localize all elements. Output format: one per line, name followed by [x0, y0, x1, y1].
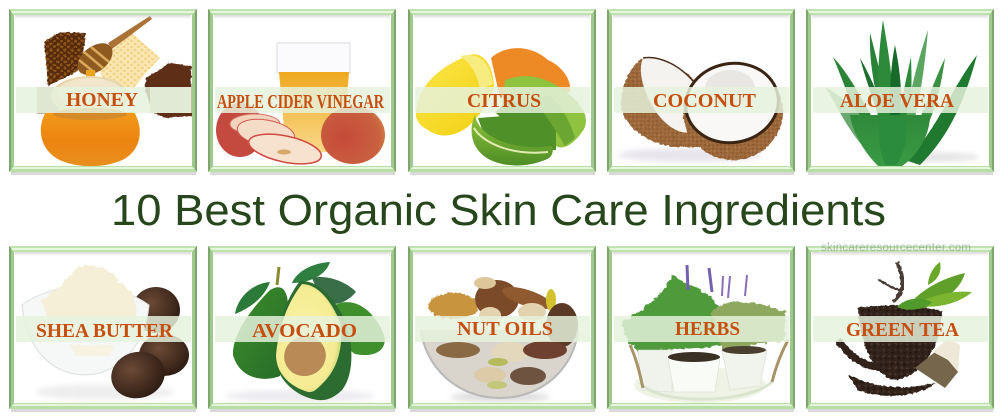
frame: green tea: [806, 246, 994, 412]
label: herbs: HERBS: [675, 318, 740, 340]
illustration: coconut halves: [618, 54, 786, 162]
label band: coconut: [614, 87, 789, 113]
frame: avocado: [208, 246, 396, 412]
panel: apple cider vinegar: [208, 9, 396, 175]
label: avocado: AVOCADO: [252, 320, 357, 342]
label band: nut oils: [415, 316, 590, 342]
panel: coconut: [607, 9, 795, 175]
illustration: citrus peels: [416, 48, 586, 165]
frame: apple cider vinegar: [208, 9, 396, 175]
panel: shea butter: [9, 246, 197, 412]
panel: nut oils: [408, 246, 596, 412]
label: shea butter: SHEA BUTTER: [36, 320, 174, 342]
illustration: potted herbs: [622, 265, 788, 403]
label: honey: HONEY: [66, 89, 139, 111]
panel: honey: [9, 9, 197, 175]
illustration: shea butter bowl and nuts: [22, 266, 189, 404]
label: aloe vera: ALOE VERA: [840, 90, 955, 112]
frame: citrus: [408, 9, 596, 175]
label: citrus: CITRUS: [467, 90, 541, 112]
illustration: bowl of nuts: [421, 277, 578, 402]
illustration: honey jar and comb: [37, 16, 192, 166]
panel: aloe vera: [806, 9, 994, 175]
panel: green tea: [806, 242, 994, 412]
illustration: aloe vera plant: [825, 20, 980, 166]
frame: shea butter: [9, 246, 197, 412]
panel: citrus: [408, 9, 596, 175]
label: nut oils: NUT OILS: [457, 318, 553, 340]
label band: herbs: [614, 316, 789, 342]
frame: herbs: [607, 246, 795, 412]
frame: honey: [9, 9, 197, 175]
title: 10 Best Organic Skin Care Ingredients: [111, 186, 886, 235]
frame: nut oils: [408, 246, 596, 412]
frame: aloe vera: [806, 9, 994, 175]
illustration: vinegar glass and apples: [216, 43, 385, 169]
label: coconut: COCONUT: [653, 90, 757, 112]
label: apple cider vinegar: APPLE CIDER VINEGAR: [217, 91, 384, 113]
illustration: tea leaf cup: [838, 262, 972, 396]
label: green tea: GREEN TEA: [846, 319, 960, 341]
label band: apple cider vinegar: [215, 87, 390, 113]
label band: citrus: [415, 87, 590, 113]
illustration: avocados and leaves: [225, 262, 385, 402]
label band: shea butter: [16, 316, 191, 342]
frame: coconut: [607, 9, 795, 175]
label band: avocado: [215, 316, 390, 342]
watermark: skincareresourcecenter.com: [821, 242, 971, 254]
label band: honey: [16, 87, 191, 113]
panel: herbs: [607, 246, 795, 412]
label band: aloe vera: [813, 87, 988, 113]
label band: green tea: [813, 316, 988, 342]
panel: avocado: [208, 246, 396, 412]
